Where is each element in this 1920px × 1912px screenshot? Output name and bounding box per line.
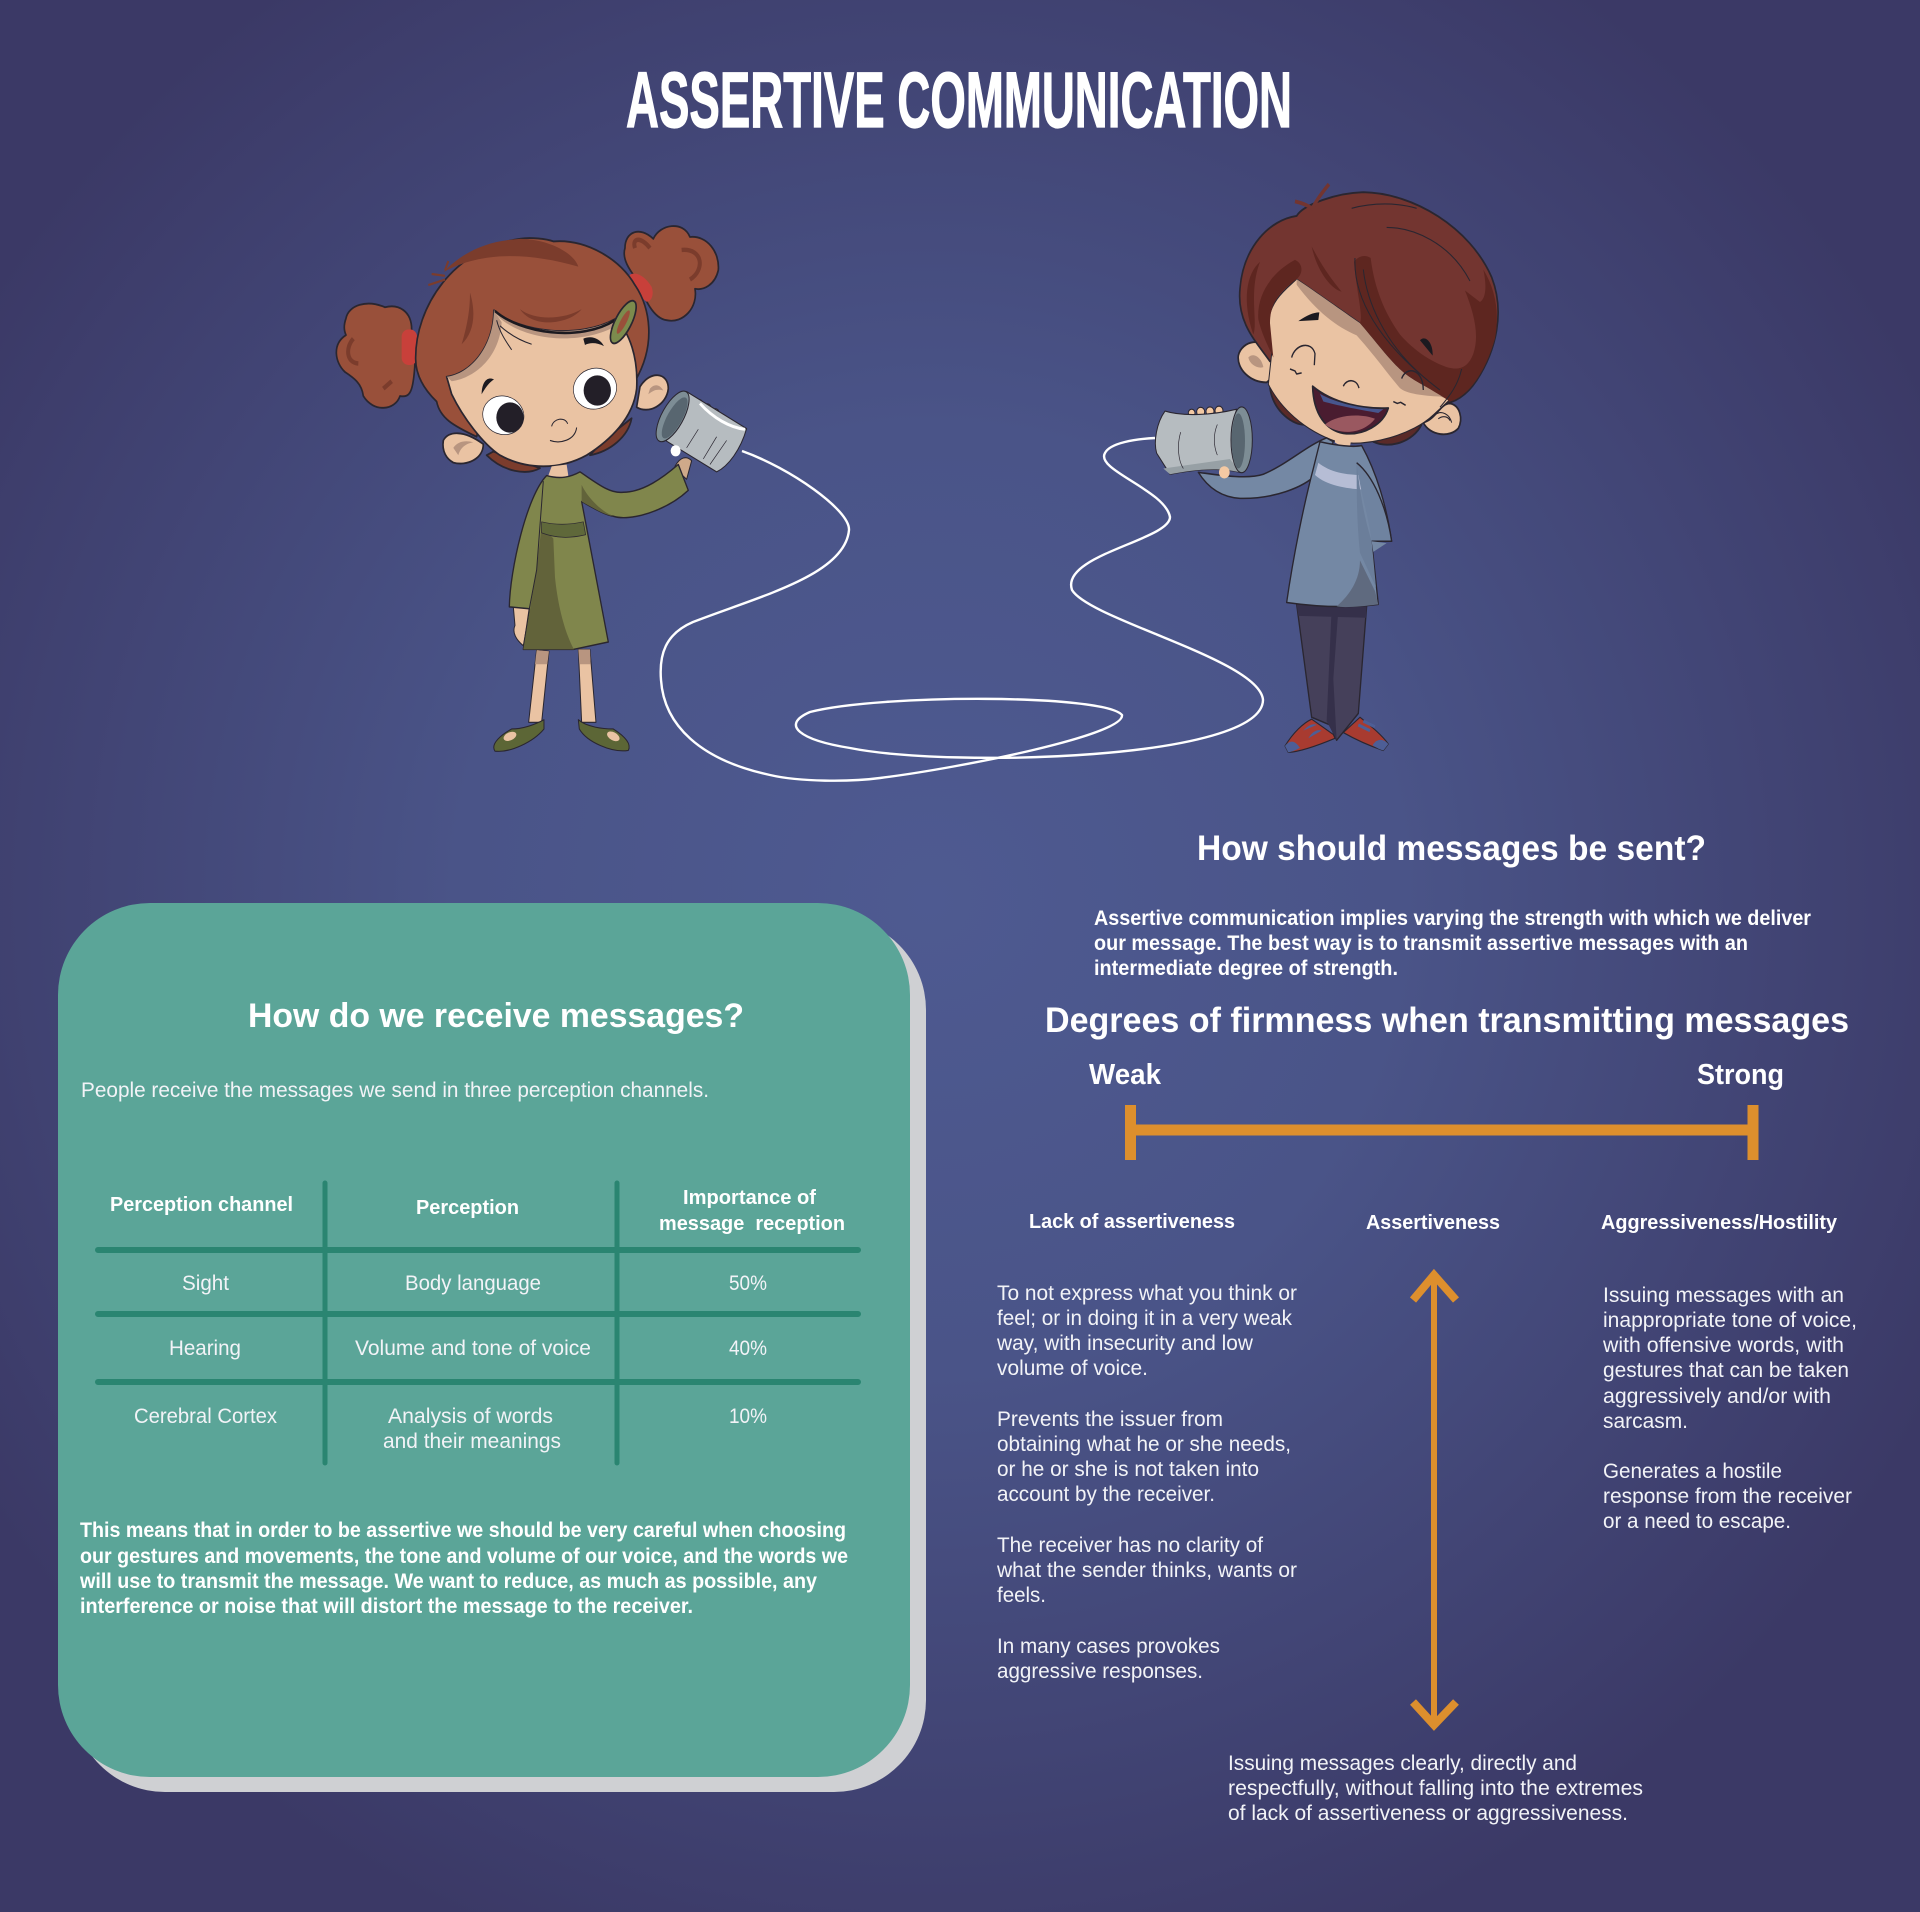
text block: aggressiveness (1602, 1284, 1857, 1533)
title: ASSERTIVE COMMUNICATION (626, 55, 1292, 144)
text block: lack of assertiveness: account by the receiver. (997, 1483, 1215, 1506)
panel heading: How do we receive messages? (248, 997, 744, 1035)
perception table: Analysis of words (388, 1405, 553, 1428)
text block: lack of assertiveness: feel; or in doing it in a very weak (997, 1307, 1292, 1330)
perception table: Cerebral Cortex (134, 1405, 277, 1428)
perception table: 10% (729, 1405, 767, 1428)
perception table: Importance of (683, 1187, 816, 1209)
text block: assertiveness: Issuing messages clearly, directly and (1228, 1752, 1577, 1775)
illustration: girl holding tin can (336, 226, 747, 751)
heading: how should messages be sent: How should messages be sent? (1197, 829, 1706, 868)
column heading: aggressiveness: Aggressiveness/Hostility (1601, 1212, 1838, 1234)
text block: lack of assertiveness: The receiver has no clarity of (997, 1534, 1263, 1557)
perception table (98, 1183, 858, 1463)
heading: degrees of firmness: Degrees of firmness when transmitting messages (1045, 1001, 1849, 1040)
text block: assertiveness (1228, 1752, 1643, 1825)
text block: aggressiveness: aggressively and/or with (1603, 1385, 1831, 1408)
perception table: message reception (659, 1213, 845, 1235)
scale: weak to strong: Strong (1697, 1059, 1784, 1091)
scale: weak to strong (1089, 1059, 1784, 1160)
text block: assertive communication intro: intermediate degree of strength. (1094, 957, 1398, 980)
text block: lack of assertiveness: Prevents the issuer from (997, 1408, 1223, 1431)
text block: lack of assertiveness: or he or she is not taken into (997, 1458, 1259, 1481)
text block: aggressiveness: or a need to escape. (1603, 1510, 1791, 1533)
panel background (58, 903, 910, 1777)
text block: lack of assertiveness: feels. (997, 1584, 1046, 1607)
panel conclusion text: interference or noise that will distort the message to the receiver. (80, 1595, 693, 1618)
column heading: assertiveness: Assertiveness (1366, 1212, 1500, 1234)
text block: assertive communication intro: our message. The best way is to transmit assertive messages with an (1094, 932, 1748, 955)
text block: aggressiveness: response from the receiver (1603, 1485, 1852, 1508)
text block: assertive communication intro: Assertive communication implies varying the strength with which we deliver (1094, 907, 1811, 930)
perception table: Perception channel (110, 1194, 293, 1216)
scale: weak to strong: Weak (1089, 1059, 1162, 1091)
text block: aggressiveness: with offensive words, with (1602, 1334, 1844, 1357)
panel conclusion text: will use to transmit the message. We want to reduce, as much as possible, any (79, 1570, 817, 1593)
perception table: Body language (405, 1272, 541, 1295)
perception table: Hearing (169, 1337, 241, 1360)
panel: how do we receive messages (58, 903, 926, 1792)
text block: assertiveness: respectfully, without falling into the extremes (1228, 1777, 1643, 1800)
text block: aggressiveness: inappropriate tone of voice, (1603, 1309, 1857, 1332)
perception table: Sight (182, 1272, 229, 1295)
arrow: assertiveness double-headed (1413, 1274, 1456, 1725)
text block: lack of assertiveness: To not express what you think or (997, 1282, 1297, 1305)
perception table: 50% (729, 1272, 767, 1295)
text block: lack of assertiveness: obtaining what he or she needs, (997, 1433, 1291, 1456)
panel intro: People receive the messages we send in three perception channels. (81, 1079, 709, 1102)
panel shadow (73, 918, 926, 1792)
perception table: Perception (416, 1197, 519, 1219)
string between the two cans (661, 438, 1263, 781)
text block: lack of assertiveness: In many cases provokes (997, 1635, 1220, 1658)
perception table: Volume and tone of voice (355, 1337, 591, 1360)
perception table: and their meanings (383, 1430, 561, 1453)
text block: aggressiveness: Generates a hostile (1603, 1460, 1782, 1483)
text block: assertive communication intro (1094, 907, 1811, 980)
text block: lack of assertiveness: way, with insecurity and low (996, 1332, 1254, 1355)
text block: aggressiveness: Issuing messages with an (1603, 1284, 1844, 1307)
perception table: 40% (729, 1337, 767, 1360)
text block: assertiveness: of lack of assertiveness or aggressiveness. (1228, 1802, 1628, 1825)
text block: lack of assertiveness (996, 1282, 1297, 1683)
panel conclusion text: our gestures and movements, the tone and volume of our voice, and the words we (80, 1545, 848, 1568)
text block: lack of assertiveness: aggressive responses. (997, 1660, 1203, 1683)
illustration: boy holding tin can (1155, 184, 1498, 752)
panel conclusion text: This means that in order to be assertive we should be very careful when choosing (80, 1519, 846, 1542)
text block: lack of assertiveness: volume of voice. (997, 1357, 1148, 1380)
text block: lack of assertiveness: what the sender thinks, wants or (996, 1559, 1297, 1582)
column heading: lack of assertiveness: Lack of assertiveness (1029, 1211, 1235, 1233)
panel conclusion text (79, 1519, 848, 1618)
text block: aggressiveness: sarcasm. (1603, 1410, 1688, 1433)
text block: aggressiveness: gestures that can be taken (1603, 1359, 1849, 1382)
